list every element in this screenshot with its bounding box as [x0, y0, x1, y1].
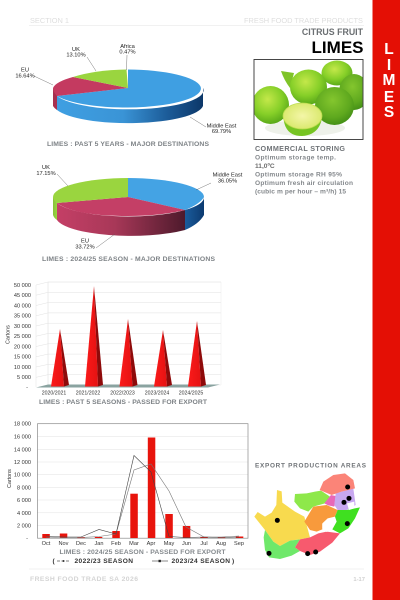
axis labels: 6 000 [17, 498, 31, 504]
photo: limes [252, 60, 369, 140]
text block: commercial storing: 11,0ºC [255, 163, 275, 170]
page header: SECTION 1 [30, 16, 69, 25]
page header: FRESH FOOD TRADE PRODUCTS [244, 16, 363, 25]
chart caption: past 5 years: LIMES : PAST 5 YEARS - MAJOR DESTINATIONS [47, 141, 209, 148]
pie labels: 69.79% [212, 129, 231, 135]
axis labels: 40 000 [14, 304, 31, 310]
axis labels: 16 000 [14, 434, 31, 440]
pie labels [36, 165, 243, 250]
axis labels: 4 000 [17, 511, 31, 517]
month labels: Apr [147, 541, 155, 547]
axis labels: - [26, 385, 28, 391]
heading: citrus fruit: CITRUS FRUIT [302, 27, 364, 37]
month labels: Jun [182, 541, 191, 547]
pie labels: Middle East [213, 172, 243, 178]
month labels: Dec [76, 541, 86, 547]
axis labels: 14 000 [14, 447, 31, 453]
pie chart: 2024/25 season [36, 165, 243, 250]
heading: export production areas: EXPORT PRODUCTION AREAS [255, 462, 367, 470]
chart caption: 2024/25 season export: LIMES : 2024/25 SEASON - PASSED FOR EXPORT [60, 549, 226, 556]
line: 2022/23 season [46, 464, 239, 538]
month labels: May [164, 541, 174, 547]
axis labels: 18 000 [14, 422, 31, 428]
text block: commercial storing: (cubic m per hour – m³/h) 15 [255, 188, 346, 196]
page footer: FRESH FOOD TRADE SA 2026 [30, 576, 138, 583]
pie chart: past 5 years [15, 44, 237, 135]
chart legend: 2022/23 SEASON [74, 558, 133, 565]
month labels: Mar [129, 541, 139, 547]
production area markers [266, 484, 351, 556]
axis title: Cartons [6, 325, 12, 344]
map: South Africa production areas [254, 473, 360, 559]
month labels: Oct [42, 541, 51, 547]
axis title: Cartons [7, 469, 13, 488]
x labels: 2020/2021 [42, 390, 66, 396]
pie labels: Africa [120, 44, 136, 50]
axis labels: 45 000 [14, 293, 31, 299]
axis labels: 20 000 [14, 344, 31, 350]
chart caption: past 5 seasons: LIMES : PAST 5 SEASONS - PASSED FOR EXPORT [39, 399, 208, 406]
axis labels: 35 000 [14, 314, 31, 320]
chart legend: 2023/24 SEASON [172, 558, 230, 565]
axis labels: 25 000 [14, 334, 31, 340]
month labels [42, 541, 244, 547]
province: Gauteng [324, 495, 336, 507]
side band title: E [384, 89, 394, 106]
axis labels: - [26, 536, 28, 542]
pie labels: 17.15% [36, 171, 56, 177]
pie labels: Middle East [207, 124, 237, 130]
pie labels [15, 44, 237, 135]
text block: commercial storing: Optimum storage RH 95% [255, 172, 342, 178]
province: Northern Cape [254, 490, 310, 546]
month labels: Feb [111, 541, 121, 547]
pie labels: EU [21, 68, 29, 74]
page footer [29, 569, 365, 583]
side band title: S [384, 104, 394, 121]
heading: limes: LIMES [312, 38, 364, 57]
province: Western Cape [264, 530, 300, 559]
x labels [42, 390, 203, 396]
side band title [383, 41, 395, 121]
red side band [372, 0, 400, 600]
text block: commercial storing [255, 144, 353, 196]
province: Free State [304, 505, 338, 532]
pie labels: UK [42, 165, 50, 171]
x labels: 2024/2025 [179, 390, 203, 396]
province: North West [294, 491, 330, 512]
axis labels: 5 000 [17, 375, 31, 381]
month labels: Nov [59, 541, 69, 547]
combo chart: 2024/25 season [7, 422, 248, 547]
province: Mpumalanga [334, 488, 356, 510]
month labels: Jan [94, 541, 104, 547]
province: KwaZulu-Natal [332, 507, 360, 533]
pie labels: 13.10% [66, 52, 86, 58]
chart legend: ( [52, 558, 56, 565]
pie labels: 0.47% [119, 50, 136, 56]
pie labels: UK [72, 47, 80, 53]
3D cone chart: past 5 seasons [6, 282, 221, 396]
pie labels: EU [81, 238, 89, 244]
x labels: 2022/2023 [110, 390, 135, 396]
side band title: M [383, 72, 395, 89]
chart legend [52, 558, 234, 565]
chart caption: 2024/25 season: LIMES : 2024/25 SEASON - MAJOR DESTINATIONS [42, 256, 215, 263]
province: Lesotho [322, 519, 337, 532]
axis labels: 50 000 [14, 283, 31, 289]
axis labels: 10 000 [14, 365, 31, 371]
side band title: L [384, 41, 394, 58]
month labels: Jul [200, 541, 208, 547]
axis labels: 12 000 [14, 460, 31, 466]
cones [51, 286, 206, 386]
text block: commercial storing: Optimum storage temp. [255, 154, 336, 162]
x labels: 2023/2024 [145, 390, 169, 396]
pie labels: 16.64% [15, 74, 35, 80]
province: Limpopo [320, 473, 355, 495]
axis labels: 2 000 [17, 524, 31, 530]
province: Eastern Cape [295, 532, 340, 555]
bars [42, 438, 243, 538]
axis labels: 8 000 [17, 485, 31, 491]
text block: commercial storing: Optimum fresh air circulation [255, 180, 353, 187]
pie labels: 36.05% [218, 178, 237, 184]
page header [29, 16, 364, 26]
page footer: 1-17 [353, 577, 365, 583]
line: 2023/24 season [46, 456, 239, 538]
text block: commercial storing: COMMERCIAL STORING [255, 144, 345, 153]
province: Swaziland [347, 502, 354, 510]
chart floor [36, 384, 220, 388]
axis labels [14, 283, 31, 391]
axis labels: 30 000 [14, 324, 31, 330]
axis labels: 10 000 [14, 473, 31, 479]
chart legend: ) [232, 558, 234, 565]
axis labels: 15 000 [14, 354, 31, 360]
side band title: I [387, 57, 391, 74]
axis labels [14, 422, 31, 542]
month labels: Aug [216, 541, 226, 547]
pie labels: 33.72% [75, 244, 95, 250]
x labels: 2021/2022 [76, 390, 100, 396]
month labels: Sep [234, 541, 244, 547]
